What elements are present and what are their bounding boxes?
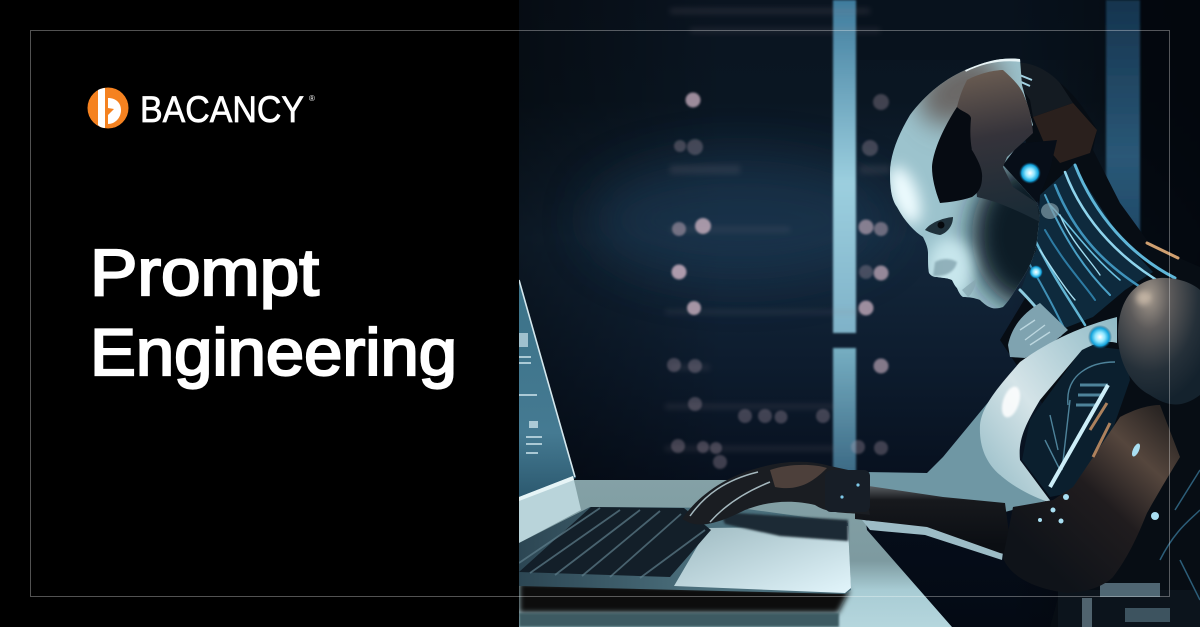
- neck and hair cables: [1020, 165, 1178, 335]
- upper arm and elbow: [1003, 405, 1180, 593]
- laptop hinge: [519, 476, 581, 543]
- white torso plate: [980, 317, 1117, 503]
- bottom desk strip: [519, 613, 839, 627]
- wrist joint: [825, 470, 870, 512]
- blurred horizontal light streaks: [665, 8, 890, 451]
- neck cable bed: [1020, 165, 1153, 330]
- ear housing: [1003, 140, 1057, 203]
- rear head block: [1033, 103, 1097, 163]
- chest cavity: [1022, 345, 1130, 497]
- robot hand: [682, 462, 870, 525]
- top rim light: [965, 59, 1022, 70]
- eye: [925, 217, 953, 235]
- brown head cap: [957, 70, 1040, 222]
- skull and face: [880, 40, 1088, 320]
- bokeh server lights: [667, 92, 889, 469]
- forearm underside rim: [862, 520, 1003, 560]
- black head panel: [932, 107, 982, 203]
- cheek brightness: [928, 238, 972, 298]
- nose shadow: [933, 259, 957, 276]
- neck light: [1029, 265, 1043, 279]
- forehead brightness: [883, 162, 927, 228]
- robot head: [890, 58, 1097, 308]
- shoulder highlight: [1136, 291, 1150, 305]
- server room background: [519, 0, 1200, 627]
- laptop screen: [519, 280, 576, 499]
- arm highlights: [1038, 442, 1159, 524]
- title: Prompt: [90, 235, 319, 309]
- blue light pillars: [833, 0, 1140, 473]
- chest collar: [1008, 303, 1068, 358]
- forearm: [855, 484, 1012, 556]
- laptop screen text: [519, 333, 542, 454]
- laptop shadow: [519, 582, 850, 613]
- logo wordmark: BACANCY: [140, 89, 304, 130]
- hand shadow on laptop: [720, 512, 848, 541]
- laptop: [519, 280, 851, 627]
- neck plate: [1041, 203, 1059, 219]
- desk: [519, 480, 952, 627]
- top grey shading: [905, 40, 1015, 140]
- laptop base: [519, 507, 851, 594]
- light wedge under chest: [860, 400, 1050, 512]
- logo: Bacancy: [88, 88, 315, 130]
- registered mark: ®: [309, 94, 315, 103]
- logo icon: [88, 88, 128, 128]
- lips: [962, 278, 977, 297]
- shaded jaw: [972, 163, 1088, 307]
- palm rest: [674, 526, 851, 593]
- title: [90, 235, 457, 389]
- left black panel: [0, 0, 519, 627]
- torso highlight: [1001, 386, 1021, 418]
- title: Engineering: [90, 315, 457, 389]
- back of head cables: [1005, 63, 1073, 117]
- back cables dark mass: [1000, 66, 1200, 627]
- keyboard: [519, 507, 711, 578]
- photo panel: robot typing on laptop: [519, 0, 1200, 627]
- chest light: [1088, 325, 1112, 349]
- shoulder sphere: [1118, 278, 1200, 404]
- arm orange reflections: [1090, 403, 1110, 457]
- lower machinery: [1058, 470, 1200, 627]
- light tube: [1050, 385, 1108, 487]
- robot body: [855, 66, 1200, 627]
- head light: [1019, 162, 1041, 184]
